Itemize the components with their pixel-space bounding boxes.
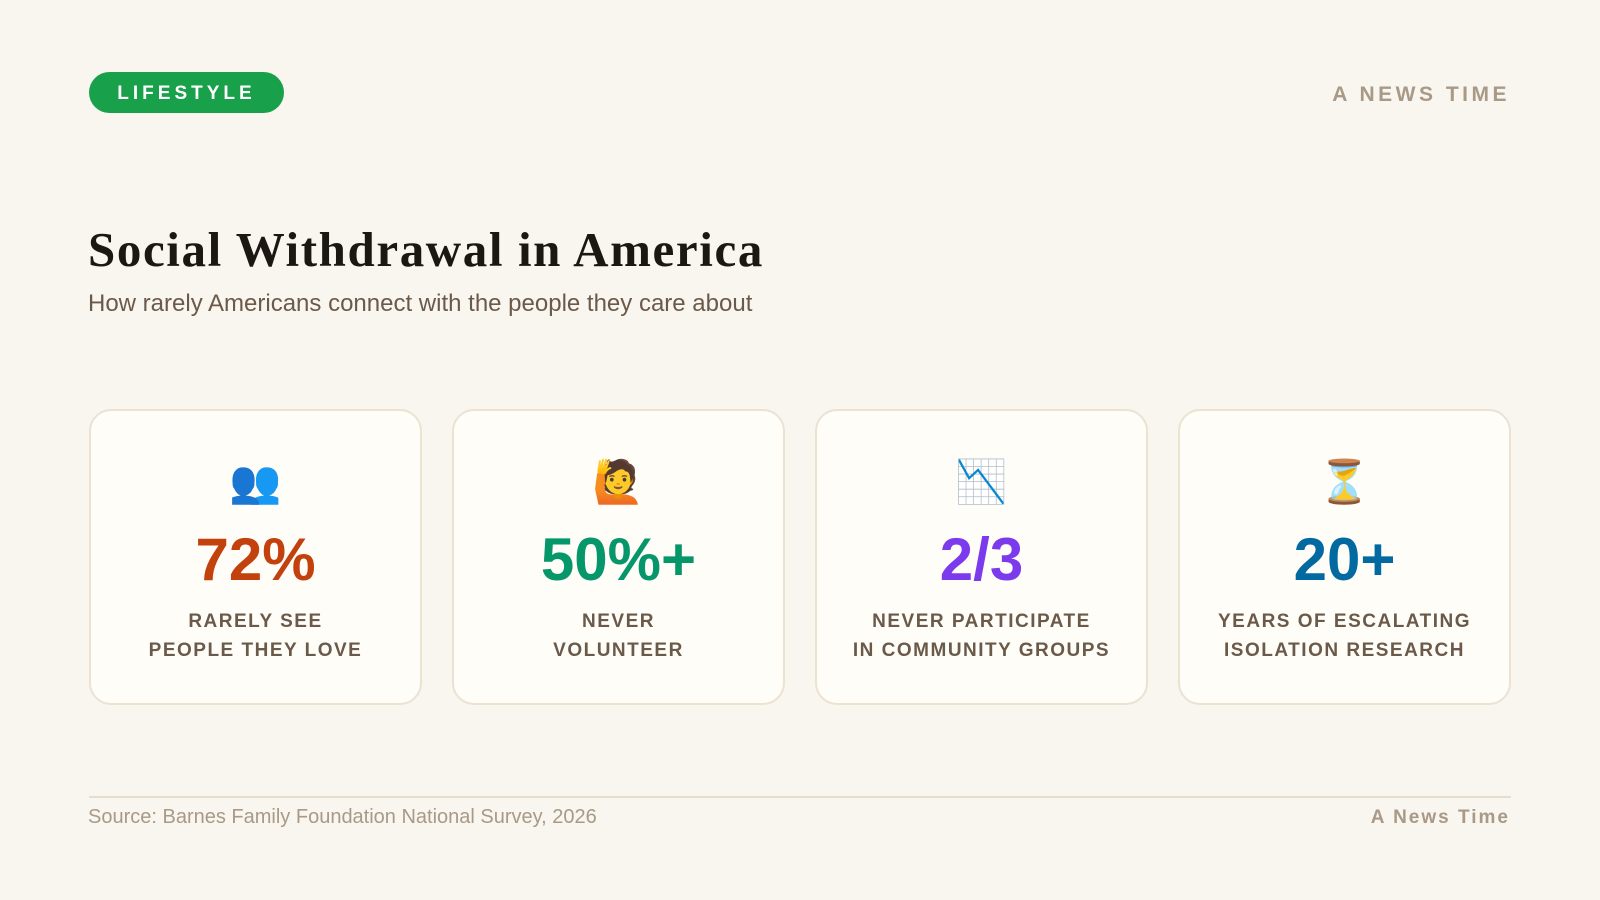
icon: raised hand: 🙋: [592, 458, 645, 507]
stat cards: [89, 409, 1511, 705]
number: 50%+: [541, 526, 696, 593]
icon: chart down: 📉: [955, 458, 1008, 507]
footer brand: A News Time: [1371, 807, 1510, 828]
label: [553, 611, 684, 661]
card: 50%+: [452, 409, 785, 705]
label: YEARS OF ESCALATING: [1218, 611, 1471, 632]
number: 2/3: [940, 526, 1023, 593]
source: Source: Barnes Family Foundation National Survey, 2026: [88, 806, 597, 828]
card: 72%: [89, 409, 422, 705]
label: VOLUNTEER: [553, 640, 684, 661]
number: 72%: [195, 526, 316, 593]
label: [853, 611, 1110, 661]
label: [1218, 611, 1471, 661]
icon: two people: 👥: [229, 458, 282, 507]
label: ISOLATION RESEARCH: [1224, 640, 1465, 661]
tag: lifestyle: LIFESTYLE: [117, 83, 256, 104]
label: PEOPLE THEY LOVE: [149, 640, 362, 661]
title: Social Withdrawal in America: [88, 222, 764, 277]
label: NEVER PARTICIPATE: [872, 611, 1091, 632]
subtitle: How rarely Americans connect with the people they care about: [88, 290, 752, 317]
card: 20+: [1178, 409, 1511, 705]
icon: hourglass: ⏳: [1318, 458, 1371, 507]
number: 20+: [1294, 526, 1395, 593]
card: 2/3: [815, 409, 1148, 705]
label: [149, 611, 362, 661]
brand header: A NEWS TIME: [1332, 83, 1510, 106]
label: IN COMMUNITY GROUPS: [853, 640, 1110, 661]
label: NEVER: [582, 611, 655, 632]
label: RARELY SEE: [188, 611, 323, 632]
tag: lifestyle: [89, 72, 284, 113]
